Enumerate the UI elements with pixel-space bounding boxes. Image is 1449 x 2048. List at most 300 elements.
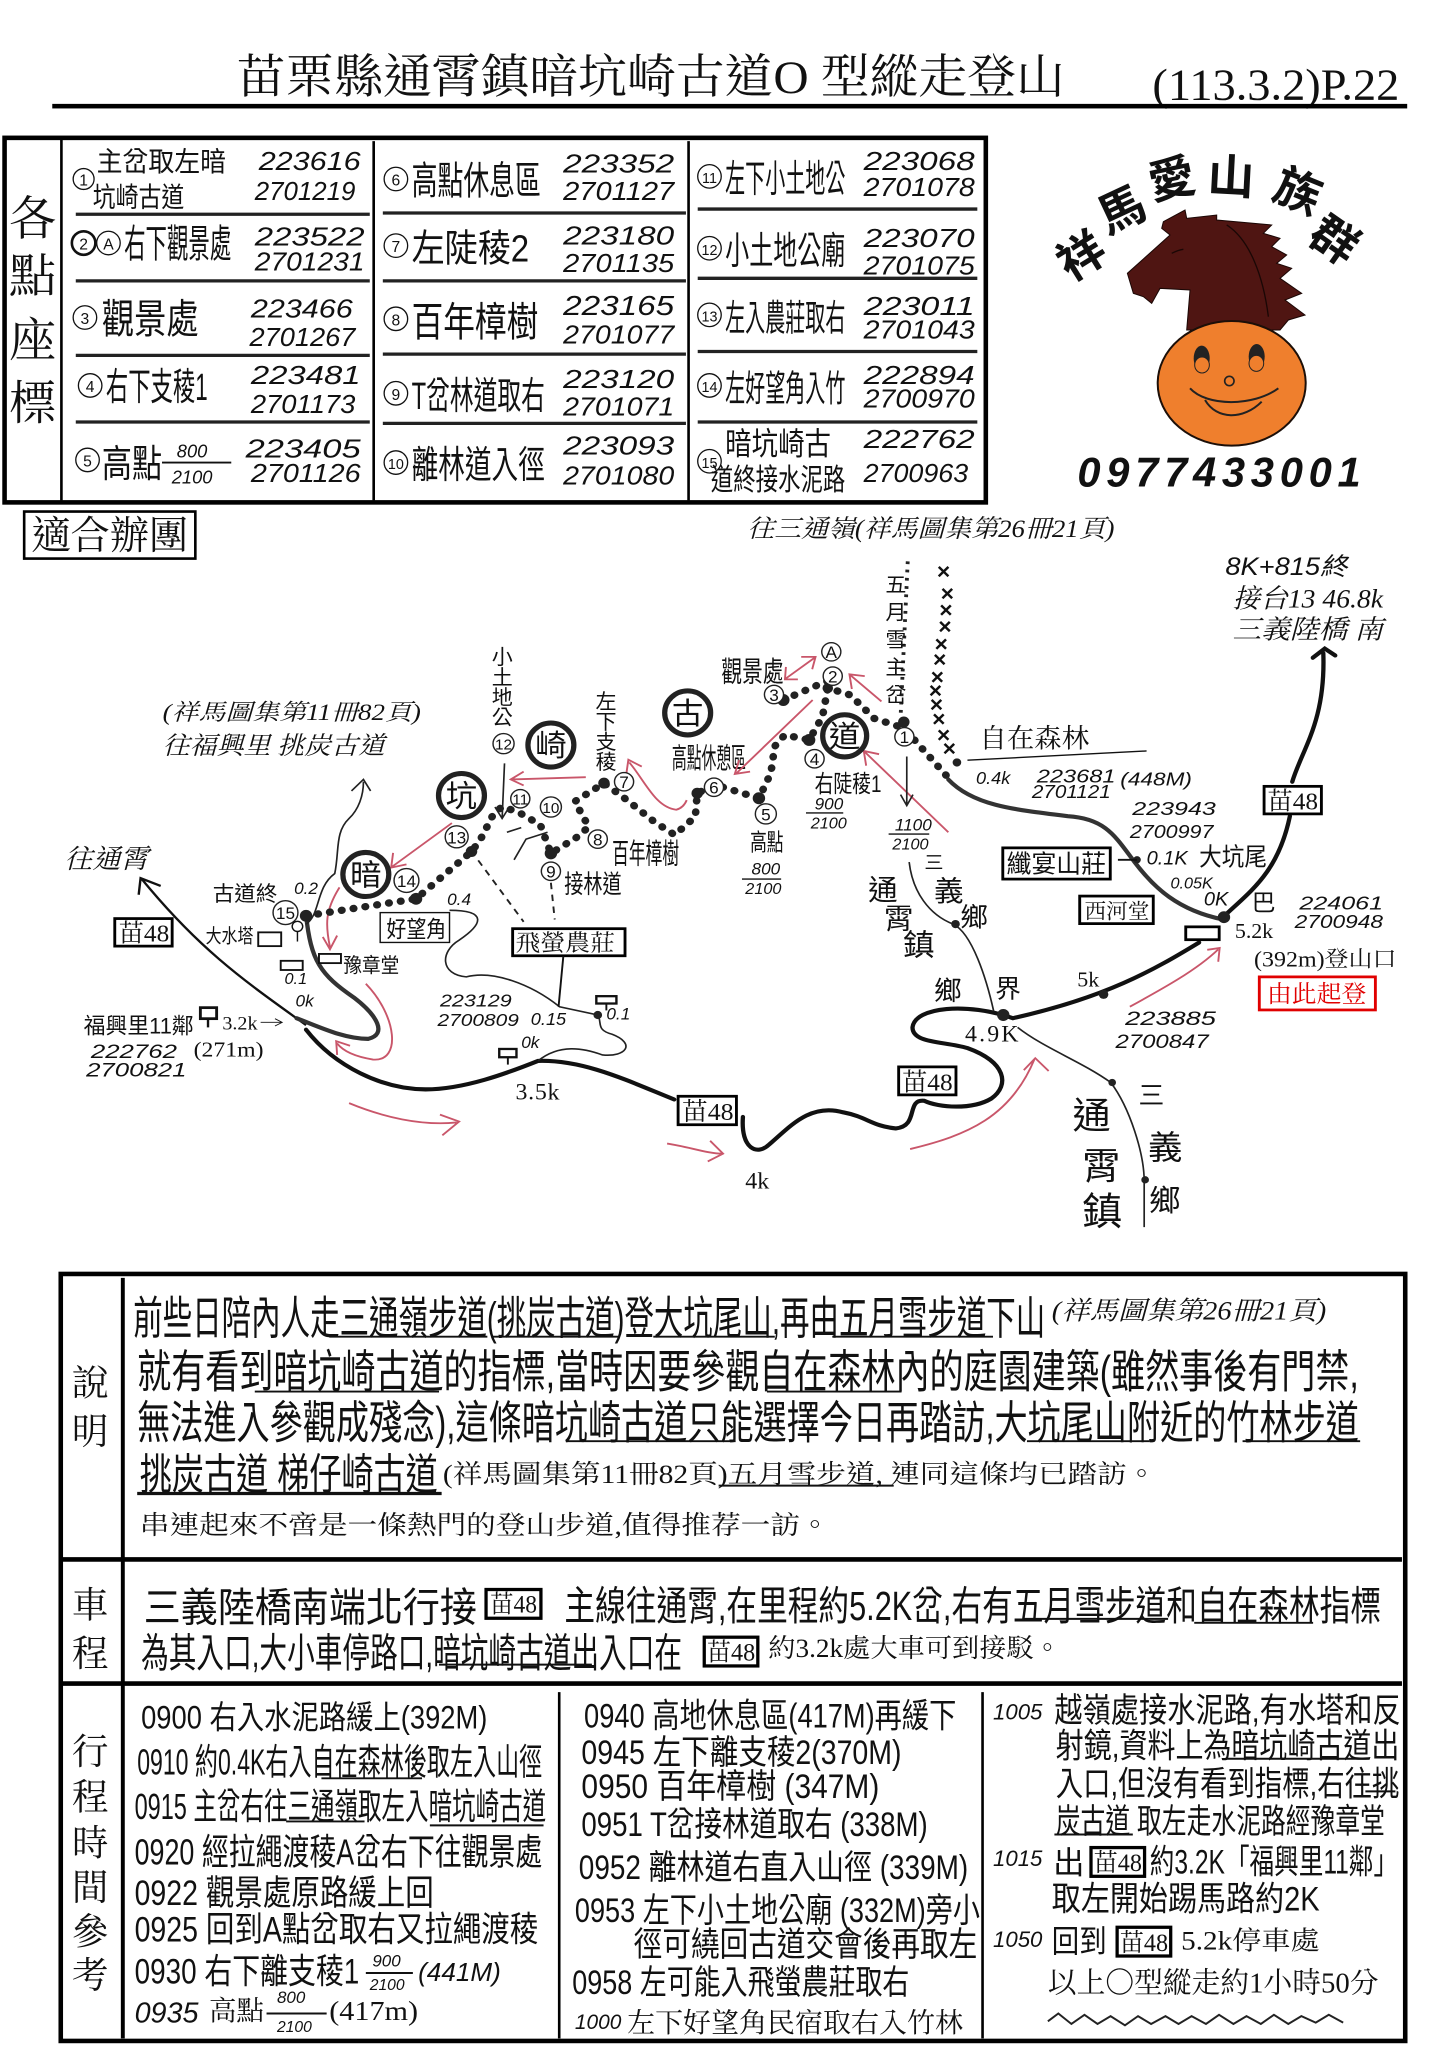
itinerary column 1: 0920 經拉繩渡稜A岔右下往觀景處	[135, 1832, 542, 1873]
label: 3.2k	[222, 1013, 282, 1035]
label: Tongxiao upper	[868, 875, 934, 962]
numbered waypoints: 5	[761, 806, 771, 824]
column 2 points: 9	[392, 387, 400, 404]
phone number: 0977433001	[1077, 449, 1361, 496]
box: Feiying farm	[513, 929, 625, 1007]
trail: crossed-out route: ×	[938, 614, 952, 639]
itinerary column 3	[993, 1692, 1401, 2025]
column 1 points: 2	[79, 237, 88, 254]
trail: crossed-out route: ×	[931, 665, 944, 689]
date and page number: (113.3.2)P.22	[1152, 59, 1399, 109]
column 1 points: 2100	[171, 466, 213, 487]
pink direction arrows	[735, 657, 1220, 1149]
label: Sanyi upper: 三	[924, 852, 944, 873]
label: Dakengwei: 大坑尾	[1199, 844, 1267, 871]
column 1 points: 2701219	[254, 176, 355, 206]
label: Sanyi lower: 三	[1138, 1083, 1164, 1110]
label: 0.4k coordinates: 0.4k	[976, 768, 1011, 788]
numbered waypoints: A	[826, 644, 838, 662]
label: 4k: 4k	[745, 1169, 769, 1194]
label: marker 0.1: 0.1	[285, 971, 307, 988]
column 3 points: 222762	[862, 424, 975, 454]
road: Forest entry lane	[948, 779, 1223, 919]
itinerary column 2: 左下好望角民宿取右入竹林	[627, 2008, 963, 2038]
logo arc text	[1048, 149, 1368, 291]
trail: crossed-out route: ×	[937, 559, 950, 584]
label: Wuyuexue main junction: 五月雪主岔	[882, 574, 906, 712]
itinerary column 1: 0925 回到A點岔取右又拉繩渡稜	[135, 1911, 538, 1950]
text: driving directions: 苗48	[490, 1590, 537, 1618]
0k marker	[499, 1033, 541, 1065]
label: 0k: 0k	[296, 992, 315, 1011]
column 3 points: 223068	[862, 146, 975, 176]
column 3 points: 223011	[862, 291, 975, 321]
label: high point with elevation: 高點	[750, 830, 784, 857]
column 2 points: 2701127	[562, 176, 676, 206]
label: 0.1 marker	[593, 996, 630, 1024]
itinerary column 3: 苗48	[1120, 1929, 1168, 1957]
trail: crossed-out route: ×	[939, 598, 953, 622]
numbered waypoints: 2	[828, 668, 838, 686]
heading: coordinates: 各	[9, 194, 56, 246]
column 2 points: 2701080	[562, 461, 675, 491]
column 2 points: 高點休息區	[412, 161, 541, 204]
icon: horse head	[1127, 210, 1305, 330]
heading: description: 明	[72, 1411, 108, 1452]
column 2 points: 離林道入徑	[412, 445, 545, 487]
label: 0.4k coordinates: 2701121	[1031, 781, 1111, 802]
icon: parking sign	[200, 1008, 217, 1027]
text: driving directions: 約3.2k處大車可到接駁。	[768, 1634, 1061, 1663]
itinerary column 3: 1015	[993, 1846, 1043, 1871]
column 1 points: 2701126	[250, 458, 361, 488]
label: 4.9k: 4.9K	[965, 1022, 1019, 1048]
column 3 points: 左好望角入竹	[725, 368, 845, 409]
label: elevation 1100: 1100	[895, 816, 932, 834]
numbered waypoints: 6	[709, 779, 719, 798]
label: Sanyi lower: 鄉	[1149, 1184, 1180, 1218]
coordinates: lane: 223129	[439, 991, 512, 1011]
badge: suitable for groups: 適合辦團	[31, 515, 188, 558]
label: high point with elevation	[742, 830, 784, 898]
numbered waypoints: 9	[546, 863, 556, 882]
label: township boundary	[934, 975, 1021, 1006]
column 2 points: 2701071	[562, 392, 674, 422]
heading: itinerary: 行	[72, 1731, 108, 1772]
column 2 points: 223093	[562, 431, 675, 461]
column 2 points: 6	[392, 173, 401, 190]
coordinates: 4.9k: 223885	[1124, 1008, 1216, 1030]
arrow: toward Tongxiao	[139, 878, 306, 1025]
itinerary column 1: (417m)	[329, 1996, 418, 2026]
column 2 points: 223120	[562, 364, 675, 394]
big label circle	[823, 715, 867, 757]
column 3 points: 15	[701, 456, 717, 472]
label: Tongxiao upper: 鎮	[903, 928, 934, 962]
column 3 points: 2700970	[863, 384, 975, 414]
big label circles: 暗	[350, 858, 382, 892]
label: Fuxing neighbourhood: 福興里11鄰	[84, 1014, 194, 1038]
numbered waypoints: 15	[276, 904, 295, 923]
coordinates: trailhead: 224061	[1298, 893, 1383, 913]
heading: description	[72, 1362, 109, 1452]
column 2 points	[384, 148, 676, 491]
icon: smiling orange face	[1158, 321, 1306, 446]
column 2 points: T岔林道取右	[412, 376, 545, 418]
column 1 points: 800	[177, 440, 208, 461]
label: Tongxiao lower: 霄	[1082, 1146, 1120, 1187]
numbered waypoints: 13	[447, 829, 466, 847]
column 3 points: 14	[701, 380, 717, 396]
heading: itinerary: 參	[72, 1911, 109, 1952]
label: 0.4k coordinates	[976, 766, 1192, 802]
heading: driving: 車	[72, 1585, 108, 1626]
text: description: (祥馬圖集第26冊21頁)	[1052, 1297, 1326, 1326]
label: trail end: 古道終	[213, 882, 277, 906]
label: marker 0.1	[281, 961, 307, 988]
township borders	[909, 862, 1144, 1227]
heading: itinerary: 時	[72, 1822, 108, 1863]
column 3 points: 2700963	[863, 458, 969, 488]
map label: to Santong ridge: 往三通嶺(祥馬圖集第26冊21頁)	[747, 516, 1115, 543]
itinerary column 1: 2100	[369, 1977, 405, 1994]
label: right ridge 1 with elevation	[806, 771, 881, 833]
label: 0.1 marker: 0.1	[606, 1005, 630, 1024]
itinerary column 2: 1000	[575, 2011, 622, 2034]
label: elevation 1100: 2100	[891, 837, 929, 854]
column 1 points: 223481	[250, 360, 361, 390]
pink direction arrows	[323, 760, 723, 1161]
numbered waypoints: 14	[397, 872, 416, 891]
heading: driving	[72, 1585, 108, 1674]
label: forest road: 接林道	[564, 869, 622, 899]
column 3 points: 左入農莊取右	[725, 298, 845, 339]
column 1 points: 5	[83, 453, 92, 470]
logo arc text: 族	[1266, 159, 1329, 225]
label: township boundary: 界	[995, 976, 1021, 1003]
trail: dashed side paths	[471, 851, 555, 922]
heading: itinerary: 間	[72, 1867, 108, 1908]
label: elevation 1100	[889, 816, 932, 854]
column 1 points: 主岔取左暗	[97, 146, 226, 177]
logo arc text: 群	[1300, 206, 1368, 275]
itinerary column 2: 0958 左可能入飛螢農莊取右	[572, 1964, 909, 2002]
coordinates: lane: 2700809	[436, 1010, 519, 1030]
column 3 points: 2701043	[863, 314, 975, 344]
trail: crossed-out route: ×	[937, 723, 950, 747]
label: township boundary: 鄉	[934, 975, 962, 1006]
label: Yuzhang hall	[319, 954, 399, 977]
boundary dots	[951, 758, 1230, 1184]
label: Tongxiao lower: 通	[1073, 1095, 1111, 1136]
label: Yuzhang hall: 豫章堂	[343, 955, 399, 977]
label: right ridge 1 with elevation: 右陡稜1	[815, 771, 881, 798]
logo arc text: 山	[1206, 150, 1256, 205]
numbered waypoints: 8	[593, 831, 603, 849]
label: 0.4k coordinates: 223681	[1035, 766, 1116, 787]
label: Dakengwei	[1147, 844, 1267, 911]
itinerary column 3: 取左開始踢馬路約2K	[1052, 1880, 1320, 1918]
road: Miao 48 west	[306, 1030, 674, 1099]
numbered waypoints: 7	[619, 773, 629, 792]
numbered waypoints: 1	[900, 728, 909, 747]
arrow: downhill spur	[901, 756, 913, 806]
column 1 points: 223405	[244, 433, 361, 463]
text: description	[133, 1293, 1360, 1540]
heading: driving: 程	[72, 1633, 108, 1674]
logo arc text: 馬	[1089, 177, 1154, 244]
column 1 points: 2701173	[250, 389, 356, 419]
label: 0.4k coordinates: (448M)	[1120, 769, 1192, 789]
road badge: 苗48	[119, 920, 169, 947]
road badge: 苗48	[902, 1069, 953, 1096]
box: Xianyan villa	[1003, 848, 1137, 879]
box: Xihe hall: 西河堂	[1084, 900, 1149, 923]
text: description: 挑炭古道 梯仔崎古道	[140, 1452, 438, 1500]
text: driving directions: 為其入口,大小車停路口,暗坑崎古道出入口在	[141, 1630, 682, 1676]
trail: crossed-out route: ×	[930, 692, 943, 717]
itinerary column 2: 徑可繞回古道交會後再取左	[634, 1926, 977, 1964]
column 2 points: 2701077	[562, 320, 676, 350]
label: 0.15: 0.15	[531, 1009, 566, 1029]
label: distance 0.4: 0.4	[447, 890, 471, 909]
trail: crossed-out route: ×	[941, 581, 954, 606]
label: Sanyi upper: 鄉	[960, 902, 988, 932]
label: Dakengwei: 0.05K	[1170, 876, 1214, 892]
label: 5k: 5k	[1077, 968, 1100, 991]
trail: crossed-out route	[929, 559, 956, 761]
label: atlas reference: (祥馬圖集第11冊82頁)	[163, 700, 421, 726]
itinerary column 1: 0930 右下離支稜1	[135, 1952, 359, 1991]
itinerary column 3: 苗48	[1094, 1849, 1142, 1877]
road: toward Taiwan 13	[1292, 649, 1335, 782]
label: junction with Taiwan 13: 接台13 46.8k	[1233, 584, 1384, 613]
label: 3.5k: 3.5k	[516, 1080, 560, 1105]
coordinates: 4.9k	[1114, 1008, 1216, 1053]
big label circles: 崎	[535, 729, 567, 763]
label: Tongxiao upper: 霄	[884, 904, 913, 936]
itinerary column 2: 0951 T岔接林道取右 (338M)	[581, 1806, 928, 1844]
label: Zizai forest: 自在森林	[979, 724, 1089, 753]
label: 5.2k: 5.2k	[1235, 919, 1273, 943]
itinerary column 1: 900	[372, 1951, 401, 1970]
itinerary column 2: 0950 百年樟樹 (347M)	[581, 1768, 879, 1806]
column 2 points: 左陡稜2	[412, 228, 529, 270]
itinerary column 2: 0940 高地休息區(417M)再緩下	[584, 1697, 956, 1735]
column 1 points: 右下觀景處	[124, 223, 231, 266]
label: right ridge 1 with elevation: 2100	[810, 816, 847, 833]
numbered waypoints	[755, 643, 914, 824]
column 1 points: 4	[86, 379, 95, 396]
label: water tower: 大水塔	[206, 926, 253, 947]
coordinates: 4.9k: 2700847	[1114, 1031, 1210, 1053]
column 3 points: 道終接水泥路	[711, 464, 845, 497]
text: description: 串連起來不啻是一條熱門的登山步道,值得推荐一訪。	[140, 1511, 830, 1540]
column 1 points: 右下支稜1	[106, 367, 208, 409]
logo: Xiangma mountaineering group	[1048, 149, 1368, 496]
column 3 points: 223070	[862, 223, 975, 253]
column 1 points: 3	[81, 311, 90, 328]
heading: itinerary: 程	[72, 1777, 108, 1818]
column 2 points: 2701135	[562, 248, 675, 278]
column 1 points: 223466	[250, 294, 353, 324]
column 1 points: 高點	[102, 444, 162, 486]
trail: temple spur	[495, 763, 548, 860]
label: Sanyi Lu bridge: 三義陸橋 南	[1233, 615, 1387, 644]
column 3 points: 12	[701, 243, 717, 259]
column 2 points: 223352	[562, 148, 675, 178]
column 3 points: 2701075	[863, 250, 975, 280]
label: small earth god: 小土地公	[488, 646, 513, 727]
label: Sanyi lower	[1138, 1083, 1182, 1218]
coordinates: Dakengwei: 223943	[1131, 798, 1217, 819]
label: end of road: 8K+815終	[1225, 554, 1350, 581]
trail: toward Fuxing	[306, 779, 371, 924]
column 1 points: 223522	[254, 222, 365, 252]
numbered waypoints: 11	[512, 792, 528, 809]
heading: coordinates	[9, 194, 56, 430]
box: Feiying farm: 飛螢農莊	[516, 930, 615, 957]
column 1 points: 坑崎古道	[93, 181, 184, 212]
trail: crossed-out route: ×	[934, 632, 948, 656]
icon: parking box at trailhead	[1186, 927, 1219, 940]
big label circles	[343, 691, 711, 897]
logo arc text: 祥	[1048, 222, 1115, 291]
trail: dotted ancient path	[306, 688, 950, 916]
column 2 points: 10	[388, 457, 404, 473]
itinerary column 2: 0953 左下小土地公廟 (332M)旁小	[575, 1892, 980, 1930]
numbered waypoints: 10	[542, 800, 559, 817]
itinerary column 1: 0910 約0.4K右入自在森林後取左入山徑	[137, 1741, 542, 1782]
itinerary column 1: 0935	[135, 1998, 200, 2030]
trail: crossed-out route: ×	[932, 707, 945, 732]
text: description: (祥馬圖集第11冊82頁)五月雪步道, 連同這條均已踏訪。	[443, 1460, 1156, 1489]
label: trailhead elevation: (392m)登山口	[1254, 947, 1396, 971]
label: toward Fuxing: 往福興里 挑炭古道	[163, 733, 388, 760]
label: Dakengwei: 0K	[1204, 889, 1229, 911]
itinerary column 1: 2100	[276, 2019, 312, 2036]
text: driving directions: 三義陸橋南端北行接	[144, 1585, 477, 1631]
coordinates: lane	[436, 991, 519, 1030]
numbered waypoints: 4	[810, 751, 819, 769]
trail: crossed-out route: ×	[929, 679, 942, 703]
coordinates: Dakengwei	[1129, 798, 1217, 842]
big label circles: 古	[672, 696, 703, 731]
column 1 points: A	[103, 237, 114, 254]
column 1 points: 1	[79, 173, 88, 190]
label: camphor tree: 百年樟樹	[612, 838, 679, 870]
label: Tongxiao lower: 鎮	[1082, 1191, 1122, 1234]
itinerary column 1: 0915 主岔右往三通嶺取左入暗坑崎古道	[135, 1786, 546, 1827]
label: right ridge 1 with elevation: 900	[815, 795, 844, 813]
road: Miao 48 east upper	[1223, 816, 1290, 917]
label: viewpoint: 觀景處	[721, 656, 784, 689]
column 3 points	[698, 146, 975, 497]
itinerary column 3: 回到	[1052, 1924, 1107, 1959]
map: west half	[65, 646, 950, 1161]
coordinates: trailhead	[1293, 893, 1384, 932]
road: connecting lane	[296, 915, 378, 1039]
trail: Wuyuexue dotted	[901, 561, 908, 717]
heading: description: 說	[72, 1362, 109, 1403]
column 1 points: 223616	[258, 146, 361, 176]
title: 苗栗縣通霄鎮暗坑崎古道O 型縱走登山	[236, 52, 1065, 104]
coordinates: 3.2k junction	[85, 1042, 187, 1081]
column 3 points: 13	[701, 309, 717, 325]
big label circles: 坑	[446, 779, 477, 813]
box: Xianyan villa: 纖宴山莊	[1007, 851, 1106, 879]
column 3 points: 2701078	[863, 172, 975, 202]
itinerary column 1: (441M)	[418, 1957, 501, 1987]
itinerary column 1	[135, 1699, 546, 2036]
callout: start here: 由此起登	[1267, 982, 1366, 1008]
itinerary column 1: 高點	[209, 1996, 264, 2026]
coordinates: Dakengwei: 2700997	[1129, 821, 1214, 842]
numbered waypoints: 12	[495, 737, 512, 754]
itinerary column 3: 1050	[993, 1927, 1043, 1952]
numbered waypoints	[273, 734, 724, 925]
label: high point rest area: 高點休憩區	[672, 743, 746, 775]
lane: thin loop	[446, 910, 626, 1061]
map: east half	[721, 554, 1396, 1234]
column 1 points: 2701267	[249, 322, 357, 352]
itinerary column 3: 以上〇型縱走約1小時50分	[1048, 1968, 1378, 2000]
trail: viewpoint spur	[783, 680, 830, 700]
heading: coordinates: 標	[9, 378, 56, 430]
column 1 points	[72, 146, 365, 488]
column 2 points: 223180	[562, 220, 675, 250]
label: water tower	[206, 921, 303, 947]
label: Tongxiao upper: 通	[868, 875, 898, 907]
label: distance 0.2: 0.2	[294, 880, 319, 898]
column 3 points: 222894	[862, 360, 975, 390]
label: Sanyi upper	[924, 852, 988, 932]
column 1 points: 觀景處	[102, 296, 199, 342]
heading: coordinates: 座	[9, 316, 56, 368]
heading: coordinates: 點	[9, 252, 56, 304]
numbered waypoints: 3	[769, 686, 779, 705]
column 3 points: 左下小土地公	[725, 159, 845, 201]
itinerary column 2: 0945 左下離支稜2(370M)	[581, 1734, 902, 1772]
itinerary column 1: 0922 觀景處原路緩上回	[135, 1874, 434, 1913]
label: Tongxiao lower	[1073, 1095, 1122, 1234]
text: driving directions	[141, 1583, 1381, 1676]
column 2 points: 7	[392, 239, 400, 256]
icon: trailhead temple: 巴	[1252, 890, 1276, 915]
callout: start here	[1259, 977, 1375, 1010]
road badge: 苗48	[682, 1099, 734, 1126]
label: Zizai forest	[967, 724, 1147, 760]
column 2 points: 8	[392, 312, 401, 329]
trail junction blobs	[300, 683, 910, 922]
coordinates: trailhead: 2700948	[1293, 911, 1384, 932]
road: Miao 48 east lower	[743, 942, 1199, 1150]
label: high point with elevation: 800	[752, 860, 781, 878]
trail: crossed-out route: ×	[943, 736, 956, 761]
text: driving directions: 苗48	[707, 1639, 755, 1667]
column 3 points: 小土地公廟	[725, 231, 845, 273]
panel: coordinates table	[5, 138, 986, 502]
itinerary column 1: 0900 右入水泥路緩上(392M)	[141, 1699, 487, 1736]
label: Sanyi lower: 義	[1148, 1130, 1182, 1167]
road badge: 苗48	[1267, 788, 1318, 815]
column 2 points: 百年樟樹	[412, 299, 538, 345]
itinerary column 3: 1005	[993, 1700, 1043, 1725]
coordinates: 3.2k junction: 2700821	[85, 1060, 187, 1081]
column 1 points: 2701231	[254, 246, 365, 276]
heading: itinerary	[72, 1731, 109, 1995]
panel: description, driving and itinerary	[61, 1274, 1405, 2041]
